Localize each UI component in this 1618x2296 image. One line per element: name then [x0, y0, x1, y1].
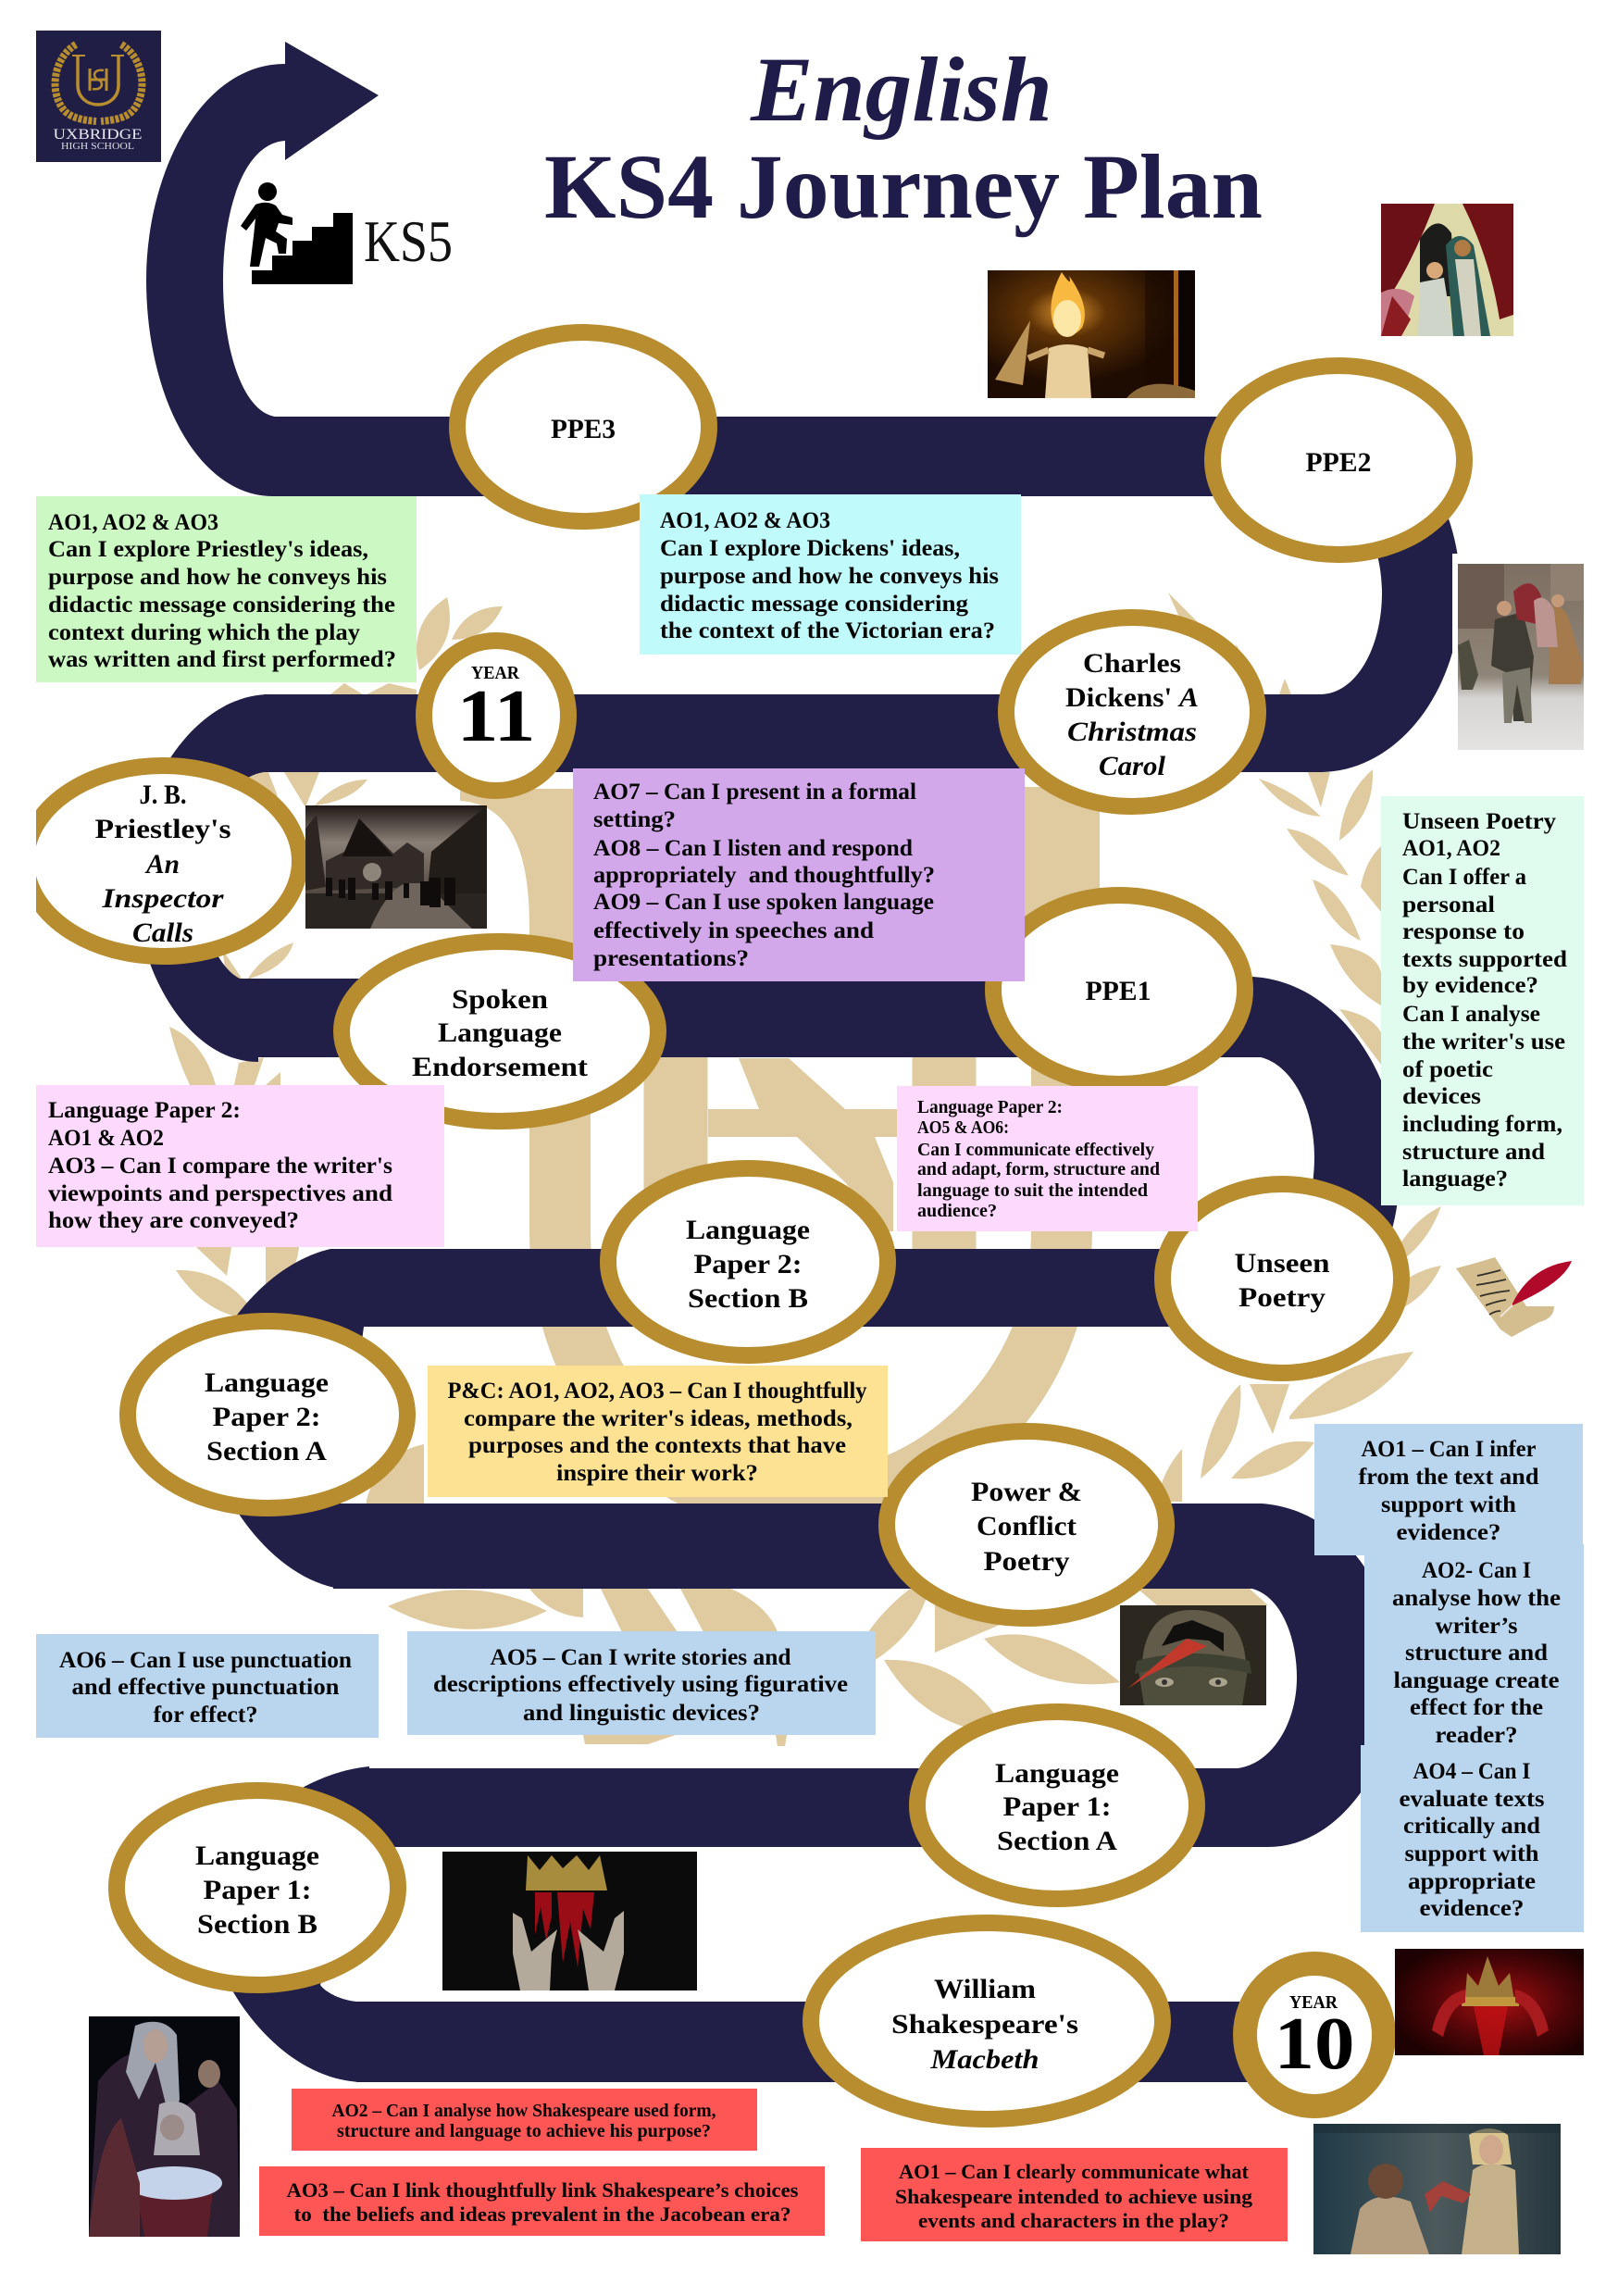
panel: AO4 evaluate: evaluate texts	[1400, 1787, 1545, 1812]
node: Spoken Language Endorsement: Endorsement	[412, 1052, 588, 1082]
panel: Priestley assessment objectives: was written and first performed?	[48, 647, 396, 672]
panel: AO5 writing: AO5 – Can I write stories and	[491, 1645, 791, 1670]
panel: AO6 punctuation	[36, 1634, 379, 1738]
panel: spoken language objectives: presentations?	[593, 946, 749, 971]
panel: AO2 analyse: analyse how the	[1392, 1586, 1561, 1611]
panel: Language Paper 2 reading objectives: how they are conveyed?	[48, 1208, 299, 1233]
title: KS4 Journey Plan	[544, 135, 1263, 238]
image: dark Victorian street	[305, 805, 487, 929]
panel: Power and Conflict objectives	[428, 1366, 888, 1497]
panel: AO1 infer	[1314, 1424, 1583, 1555]
node: Charles Dickens' A Christmas Carol: Christmas	[1067, 717, 1197, 747]
panel: Language Paper 2 reading objectives: AO3 – Can I compare the writer's	[48, 1154, 392, 1179]
node: Power & Conflict Poetry: Conflict	[977, 1511, 1077, 1541]
panel: AO5 writing	[407, 1631, 876, 1735]
node: Power & Conflict Poetry: Power &	[971, 1477, 1082, 1507]
node: Language Paper 2 Section A: Paper 2:	[213, 1402, 320, 1432]
panel: Macbeth AO3: AO3 – Can I link thoughtfully link Shakespeare’s choices	[287, 2178, 799, 2202]
image: curtain and figures	[1381, 204, 1513, 336]
panel: Macbeth AO1: Shakespeare intended to achieve using	[895, 2185, 1253, 2208]
image: soldier helmet	[1120, 1605, 1266, 1705]
node: PPE1	[993, 895, 1245, 1084]
panel: Dickens assessment objectives	[640, 494, 1021, 655]
panel: AO4 evaluate: AO4 – Can I	[1413, 1759, 1531, 1784]
node: J. B. Priestley's An Inspector Calls: Priestley's	[94, 814, 231, 844]
node: Unseen Poetry: Poetry	[1238, 1282, 1326, 1313]
node: Charles Dickens' A Christmas Carol: Charles	[1083, 648, 1181, 679]
panel: Unseen Poetry objectives	[1381, 796, 1584, 1205]
panel: Macbeth AO2: AO2 – Can I analyse how Shakespeare used form,	[331, 2101, 716, 2121]
node: William Shakespeare's Macbeth: William	[934, 1974, 1036, 2004]
panel: Power and Conflict objectives: compare the writer's ideas, methods,	[464, 1406, 853, 1431]
node: PPE2: PPE2	[1305, 447, 1372, 478]
panel: AO4 evaluate: evidence?	[1420, 1896, 1524, 1921]
panel: Dickens assessment objectives: AO1, AO2 & AO3	[660, 508, 830, 533]
panel: Macbeth AO2	[292, 2089, 757, 2151]
panel: Priestley assessment objectives: didactic message considering the	[48, 593, 395, 618]
image: Macbeth and Lady Macbeth on stage	[1313, 2124, 1561, 2254]
node: J. B. Priestley's An Inspector Calls	[0, 741, 300, 991]
panel: Dickens assessment objectives: Can I explore Dickens' ideas,	[660, 536, 960, 561]
journey road with arrow	[134, 42, 1461, 2082]
title: English	[750, 38, 1052, 141]
panel: Language Paper 2 writing objectives	[897, 1086, 1198, 1231]
logo: Uxbridge High School	[36, 31, 161, 162]
node: Year 10	[1245, 1964, 1384, 2106]
panel: Macbeth AO3: to the beliefs and ideas prevalent in the Jacobean era?	[294, 2202, 790, 2226]
panel: Language Paper 2 reading objectives: Language Paper 2:	[48, 1098, 241, 1123]
panel: Language Paper 2 reading objectives: AO1 & AO2	[48, 1126, 164, 1151]
panel: Power and Conflict objectives: P&C: AO1, AO2, AO3 – Can I thoughtfully	[448, 1379, 867, 1404]
panel: Dickens assessment objectives: purpose and how he conveys his	[660, 564, 999, 589]
panel: Unseen Poetry objectives: of poetic	[1402, 1057, 1493, 1082]
background watermark: school crest	[169, 593, 1441, 1746]
node: Year 10: 10	[1274, 2003, 1355, 2085]
panel: Dickens assessment objectives: didactic message considering	[660, 592, 969, 617]
node: PPE2	[1213, 366, 1464, 555]
panel: Macbeth AO1	[861, 2148, 1288, 2241]
node: J. B. Priestley's An Inspector Calls: An	[144, 849, 180, 880]
image: candle ghost	[988, 270, 1195, 398]
panel: Unseen Poetry objectives: structure and	[1402, 1140, 1545, 1165]
panel: Language Paper 2 writing objectives: Can I communicate effectively	[917, 1140, 1154, 1160]
node: William Shakespeare's Macbeth: Macbeth	[929, 2044, 1039, 2075]
image: red crown and hands	[1395, 1949, 1584, 2055]
node: Language Paper 2 Section B	[608, 1168, 888, 1355]
node: Language Paper 1 Section B	[117, 1791, 398, 1985]
node: Language Paper 2 Section A: Language	[205, 1367, 329, 1398]
node: William Shakespeare's Macbeth	[811, 1923, 1163, 2119]
node: Charles Dickens' A Christmas Carol	[1006, 618, 1258, 806]
node: William Shakespeare's Macbeth: Shakespeare's	[891, 2009, 1078, 2040]
panel: AO2 analyse: effect for the	[1410, 1695, 1543, 1720]
panel: AO6 punctuation: and effective punctuation	[72, 1675, 340, 1700]
node: Language Paper 2 Section B: Language	[686, 1215, 810, 1245]
panel: Language Paper 2 writing objectives: and adapt, form, structure and	[917, 1159, 1160, 1179]
node: Power & Conflict Poetry: Poetry	[983, 1546, 1070, 1577]
panel: Priestley assessment objectives: purpose and how he conveys his	[48, 565, 387, 590]
panel: Priestley assessment objectives: AO1, AO2 & AO3	[48, 510, 218, 535]
panel: Power and Conflict objectives: inspire their work?	[556, 1461, 758, 1486]
panel: Language Paper 2 reading objectives: viewpoints and perspectives and	[48, 1181, 392, 1206]
node: Year 10: YEAR	[1289, 1992, 1338, 2013]
panel: Language Paper 2 writing objectives: language to suit the intended	[917, 1180, 1148, 1201]
panel: spoken language objectives: AO8 – Can I listen and respond	[593, 836, 913, 861]
image: Bob Cratchit carrying Tiny Tim	[1452, 554, 1584, 754]
node: PPE3	[457, 332, 709, 521]
node: Year 11	[424, 641, 568, 791]
panel: AO5 writing: descriptions effectively using figurative	[433, 1672, 848, 1697]
panel: spoken language objectives: AO7 – Can I present in a formal	[593, 780, 916, 805]
panel: Priestley assessment objectives	[36, 496, 417, 682]
panel: AO2 analyse	[1364, 1544, 1584, 1748]
node: Language Paper 1 Section B: Paper 1:	[204, 1875, 311, 1905]
panel: AO2 analyse: reader?	[1435, 1723, 1518, 1748]
node: Spoken Language Endorsement	[342, 942, 658, 1121]
panel: AO2 analyse: language create	[1394, 1668, 1559, 1693]
panel: Unseen Poetry objectives: including form,	[1402, 1112, 1562, 1137]
panel: Priestley assessment objectives: Can I explore Priestley's ideas,	[48, 537, 368, 562]
panel: AO1 infer: support with	[1381, 1492, 1516, 1517]
panel: Unseen Poetry objectives: devices	[1402, 1084, 1481, 1109]
panel: AO5 writing: and linguistic devices?	[523, 1701, 760, 1726]
title	[544, 38, 1263, 238]
node: Language Paper 1 Section A: Language	[995, 1758, 1119, 1789]
panel: spoken language objectives	[573, 768, 1025, 981]
image: three witches	[89, 2016, 240, 2237]
panel: Macbeth AO1: AO1 – Can I clearly communicate what	[899, 2160, 1250, 2183]
panel: AO6 punctuation: AO6 – Can I use punctuation	[59, 1648, 352, 1673]
node: Language Paper 1 Section B: Language	[195, 1841, 319, 1871]
panel: AO1 infer: AO1 – Can I infer	[1361, 1437, 1537, 1462]
node: Language Paper 1 Section A: Section A	[997, 1826, 1117, 1856]
node: Year 11: 11	[457, 676, 535, 757]
node: Language Paper 2 Section B: Section B	[688, 1283, 808, 1314]
node: J. B. Priestley's An Inspector Calls: J. B.	[139, 780, 187, 810]
panel: AO4 evaluate	[1361, 1745, 1584, 1932]
panel: AO4 evaluate: support with	[1405, 1841, 1539, 1866]
node: Charles Dickens' A Christmas Carol: Carol	[1099, 751, 1166, 781]
node: Unseen Poetry: Unseen	[1235, 1248, 1330, 1279]
panel: AO2 analyse: AO2- Can I	[1422, 1558, 1531, 1583]
panel: Unseen Poetry objectives: Can I analyse	[1402, 1002, 1540, 1027]
panel: Unseen Poetry objectives: response to	[1402, 919, 1525, 944]
node: PPE3: PPE3	[551, 414, 616, 444]
panel: AO2 analyse: writer’s	[1435, 1614, 1518, 1639]
panel: Unseen Poetry objectives: Can I offer a	[1402, 865, 1526, 890]
icon: person climbing stairs	[241, 182, 353, 284]
node: Language Paper 1 Section B: Section B	[197, 1909, 317, 1940]
node: Power & Conflict Poetry	[887, 1431, 1166, 1618]
panel: Power and Conflict objectives: purposes and the contexts that have	[468, 1433, 846, 1458]
image: crown and bloody hands	[442, 1852, 697, 1990]
panel: Macbeth AO3	[259, 2166, 825, 2236]
panel: AO4 evaluate: critically and	[1403, 1814, 1540, 1839]
panel: Language Paper 2 reading objectives	[36, 1085, 444, 1247]
panel: Unseen Poetry objectives: AO1, AO2	[1402, 836, 1500, 861]
panel: Language Paper 2 writing objectives: Language Paper 2:	[917, 1097, 1063, 1117]
KS5 label: KS5	[364, 208, 453, 274]
panel: spoken language objectives: AO9 – Can I use spoken language	[593, 890, 934, 915]
node: J. B. Priestley's An Inspector Calls: Inspector	[101, 883, 224, 914]
node: Language Paper 2 Section A: Section A	[206, 1436, 327, 1466]
panel: Unseen Poetry objectives: personal	[1402, 892, 1495, 917]
panel: AO2 analyse: structure and	[1405, 1641, 1548, 1666]
panel: Priestley assessment objectives: context during which the play	[48, 620, 361, 645]
node: Language Paper 2 Section A	[128, 1321, 407, 1508]
node: Language Paper 2 Section B: Paper 2:	[694, 1249, 802, 1279]
panel: AO1 infer: evidence?	[1396, 1520, 1501, 1545]
panel: spoken language objectives: effectively in speeches and	[593, 918, 874, 943]
panel: AO1 infer: from the text and	[1359, 1465, 1539, 1490]
panel: Unseen Poetry objectives: texts supported	[1402, 947, 1567, 972]
node: PPE1: PPE1	[1085, 976, 1151, 1006]
panel: Language Paper 2 writing objectives: audience?	[917, 1201, 997, 1221]
node: Charles Dickens' A Christmas Carol: Dickens' A	[1065, 682, 1199, 713]
node: Unseen Poetry	[1163, 1184, 1401, 1373]
node: Spoken Language Endorsement: Spoken	[452, 984, 548, 1015]
icon: scroll and quill	[1456, 1257, 1572, 1337]
node: Year 11: YEAR	[471, 663, 520, 683]
logo: Uxbridge High School: UXBRIDGE	[54, 127, 143, 143]
panel: Dickens assessment objectives: the context of the Victorian era?	[660, 618, 995, 643]
panel: Macbeth AO1: events and characters in the play?	[918, 2209, 1229, 2232]
panel: Macbeth AO2: structure and language to achieve his purpose?	[337, 2121, 711, 2141]
panel: Unseen Poetry objectives: by evidence?	[1402, 973, 1538, 998]
node: Language Paper 1 Section A	[917, 1712, 1197, 1899]
panel: Unseen Poetry objectives: language?	[1402, 1167, 1508, 1192]
panel: Language Paper 2 writing objectives: AO5 & AO6:	[917, 1117, 1009, 1138]
panel: Unseen Poetry objectives: Unseen Poetry	[1402, 809, 1557, 834]
node: J. B. Priestley's An Inspector Calls: Calls	[132, 917, 193, 948]
node: Spoken Language Endorsement: Language	[438, 1017, 562, 1048]
panel: spoken language objectives: appropriately and thoughtfully?	[593, 863, 935, 888]
panel: Unseen Poetry objectives: the writer's use	[1402, 1029, 1565, 1054]
logo: Uxbridge High School: HIGH SCHOOL	[61, 142, 134, 152]
panel: spoken language objectives: setting?	[593, 807, 676, 832]
panel: AO6 punctuation: for effect?	[154, 1703, 257, 1728]
panel: AO4 evaluate: appropriate	[1408, 1869, 1536, 1894]
node: Language Paper 1 Section A: Paper 1:	[1003, 1791, 1111, 1822]
